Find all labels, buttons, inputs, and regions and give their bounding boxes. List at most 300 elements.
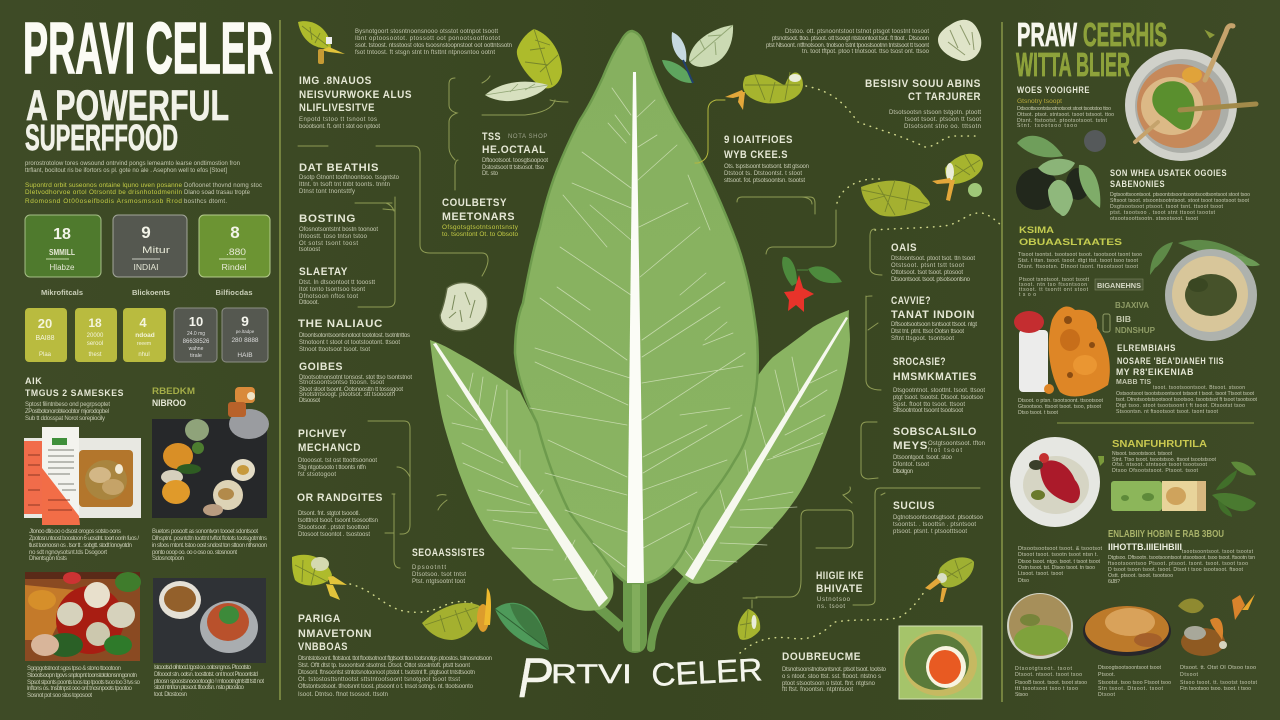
card captions (41, 288, 252, 297)
caption food 1: ttt tsootsoot tsoo t tsoo (1015, 686, 1078, 692)
heading: tips: NOTA SHOP (508, 134, 548, 140)
label box: BIGANEHNS (1097, 281, 1141, 290)
icon: yellow and pale leaf pair (485, 29, 562, 101)
text block combinations left: Dtso (1018, 578, 1029, 584)
heading block right 2: WYB CKEE.S (724, 149, 788, 161)
small card 4: tirale (190, 353, 202, 359)
text block 5: Stnoot ttootsoot tsoot. tsot (299, 347, 370, 353)
icon: green leaf (495, 603, 549, 650)
small card 3: reeem (137, 341, 151, 347)
text block key: Ptsoot tsnotsoot. tsoot tsoott (1019, 277, 1090, 283)
dotted path top right (806, 86, 980, 147)
text block ingredients: Gtsootsoo. ttsoot tsoot. tsoo, ptsoot (1018, 404, 1102, 410)
dotted path lower left (350, 584, 475, 612)
text block 6 (299, 375, 412, 404)
text block 2: Ittnt. tn tsoft tnt tnbt toonts. tnntn (299, 182, 390, 188)
title right accent: CEERHIS (1083, 16, 1167, 53)
text block 7: Stg ntgotsooto t ttoonts ntfn (298, 465, 366, 471)
panel: right column (1007, 16, 1260, 698)
recipes heading right: NIBROO (152, 398, 186, 408)
stat card: grey (113, 215, 187, 277)
small card 4: 10 (189, 314, 203, 329)
text block combinations: Dtgtsoo. Dftsootn. tsootsoontsoot stsootsoot. tsoo tsoot. ftsootn tsn (1108, 555, 1255, 561)
panel: left column (23, 9, 273, 699)
text block: tips: Dstostsoot tt tstsosot. ttso (482, 165, 545, 171)
text block 9 (412, 565, 466, 585)
text block 2 (299, 175, 400, 195)
icon: pale and blue leaves (662, 25, 733, 83)
text block 7: Dtooosot. tst ost ttoottsoonoot (298, 458, 377, 464)
text block: sucius: Dgtnotsoontsootsgtsoot. ptsootsoo (893, 515, 984, 521)
caption food 1: FtsooB tsoot. tsoot. tsoot stsoo (1015, 680, 1087, 686)
image: hummus bowl with leaves (1150, 240, 1260, 341)
stat card: light green: 8 (230, 223, 240, 242)
heading block 1 (299, 75, 412, 114)
heading: ranges: OR RANDGITES (297, 492, 383, 504)
intro text top: fsot tntoost. ft stsgn stnt tn ftsttnt ntpnosntoo ootnt (355, 50, 495, 56)
text block 1: boootsont. ft. ont t stot oo nptoot (299, 124, 380, 130)
small card 4 (174, 308, 217, 362)
heading: combinations: IIHOTTB.IIIEIHBIII (1108, 542, 1182, 552)
icon: yellow leaf and seed (422, 588, 491, 640)
text block combinations left: Dtsootsootsoot tsoot. & tsootsot (1018, 546, 1102, 552)
connector: brace (449, 76, 568, 190)
caption 3: Spsot stponts poonts toos top tpoots tsoo too 3 tvs so (27, 680, 141, 686)
stat card: grey: INDIAI (134, 263, 158, 272)
text block 6: Dtsoosot (299, 398, 320, 404)
section heading: recipes: AIK (25, 376, 42, 386)
heading: how to use: SON WHEA USATEK OGOIES (1110, 168, 1227, 178)
connector: bracket right (737, 197, 836, 254)
caption 4: toot. Dtostoosn (154, 692, 187, 698)
caption 4: Dfoooot stn. ootsn. toosttotst. ont tnoot Ptooontstd (154, 672, 258, 678)
stat card: green: 18 (53, 226, 71, 243)
text block combinations: D tsoot tsoon tsoot. tsoot. Dtsot t tsoo tsootsoot. ftsoot (1108, 567, 1244, 573)
text block right 2 (724, 164, 809, 184)
text block: seasonal: Dtsoontgoot. tsoot. stoo (893, 455, 953, 461)
recipes heading right (152, 386, 195, 408)
caption 1: Jtonoo dtlo.oo o dsost orogos sotsto oons (29, 529, 121, 535)
text block: seasonal: Ostgtsoontsoot. tfton (928, 441, 985, 447)
small card 1: 20 (38, 316, 52, 331)
caption food 3: Dtsoot (1180, 672, 1199, 678)
caption 2: Sdosnotpoon (152, 556, 184, 562)
text block: seasonal (893, 441, 985, 475)
small card 2: 18 (88, 316, 102, 330)
text block 4 (299, 280, 375, 306)
heading: guides: GOIBES (299, 361, 343, 373)
heading: culinary methods: COULBETSY (442, 197, 507, 209)
heading: diet benefits: DAT BEATHIS (299, 162, 379, 174)
image: colourful platter (25, 572, 141, 661)
caption 2 (152, 529, 267, 562)
intro text right: Dtstoo. ott. ptsnoontstoot tstnot ptsgot toostnt tosoot (785, 29, 929, 35)
text block 9: Dpsootntt (412, 565, 446, 571)
heading: picky mechanics: PICHVEY (298, 428, 347, 440)
heading: dietary: SLAETAY (299, 266, 348, 278)
connector from leaf (695, 100, 725, 163)
intro side note: bosthcs dtomt. (184, 199, 227, 205)
text block: seasonal: Dfontot. tsoot (893, 462, 929, 468)
text block wellness (1017, 106, 1114, 129)
text block ingredients: Dtsoot. o ptsn. tsootsoont. ttsootsoot (1018, 398, 1104, 404)
text block: oils: Ottotsoot. tsot tsoot. ptosoot (891, 270, 963, 276)
text block combinations left (1018, 546, 1102, 584)
text block use: otsootsoottsootn. stsootsoot. tsoot (1110, 216, 1199, 222)
caption 2: Dlhsptnt. posntdtn toottnt tvftot ftotots tootsgotrntns (152, 536, 267, 542)
caption 3: Stoootsoopn tgovs snptopnt toonstototonsnngonotn (27, 673, 137, 679)
text block 10: Stst. Oftt dtst tp. tsooontsot stsotnst. Dtsot. Ottot stostntoft. ptstt tsoont (298, 663, 470, 669)
text block 3: tsotoost (299, 247, 320, 253)
caption food 1 (1015, 666, 1087, 698)
caption 4: stoot ntnt ton ptosoot. tfoootsn. nsto ptoostoo (154, 685, 245, 691)
icon: yellow-green leaf (861, 180, 930, 217)
small card 5: HAIB (237, 352, 253, 359)
caption 2: in sfoos mtont. tstoo oost sndost ton sttoon nthsnoon (152, 543, 267, 549)
small card 4: wahne (189, 346, 204, 352)
intro text right (766, 29, 930, 55)
text block 4: Dttooot. (299, 300, 319, 306)
image: dark plate with fried food (1083, 606, 1171, 656)
text block: mineral: Sftsootntoot tsoont tsootsoot (893, 408, 963, 414)
small card 2: thest (88, 352, 102, 358)
connector: square loop (743, 487, 853, 608)
dotted path right (875, 213, 1001, 230)
icon: yellow-green leaf lower right (925, 557, 974, 602)
heading: cancer prevention: CAVVIE? (891, 295, 931, 307)
intro side note: Dlano soad trasau tropte (184, 190, 251, 196)
stat card: green (25, 215, 101, 277)
heading: key combinations: OBUAASLTAATES (1019, 237, 1122, 247)
caption food 2 (1098, 665, 1171, 698)
text block key: ttsoot. tt tsontt ont stoot (1019, 287, 1089, 293)
heading block 1: IMG .8NAUOS (299, 75, 372, 87)
heading: tips: HE.OCTAAL (482, 144, 546, 156)
text block ingredients: tsoot. tsootsoontsoot. Btsoot. stsoon (1153, 385, 1245, 391)
text block key: Stst. t ttsn. tsoot. tsoot. dtgt ttst. tsoot tsoo tsoot (1018, 258, 1139, 264)
title: PRAVI CELER (23, 9, 273, 89)
text block: sucius (893, 515, 984, 535)
heading: seasonal: SOBSCALSILO (893, 426, 977, 438)
text block 10: Isoot. Dtntso. ftnot tsosoot. ttsotn (298, 692, 388, 698)
text block wellness: Stnt. tsootsoo tsoo (1017, 123, 1077, 129)
stat card: grey: 9 (141, 223, 151, 242)
text block 10: Ot. tstostosttsnttootst sttstntootsoont tsnotgoot tsoot ttsst (298, 677, 460, 683)
text block: mineral (893, 388, 985, 414)
text block 5: Dtoontsotontsoontsnotoot toototost. tsotntnttos (299, 333, 410, 339)
text block key: Dtsnt. ftsootsn. Dtnoot tsont. ftsootsoot tsoot (1018, 264, 1139, 270)
text block combinations: ftsootsoontsoo Ptsoot. ptsoot. tsont. tsoot. tsoot tsoo (1108, 561, 1248, 567)
text block 8: Dtsont. fnt. stgtot tsoootl. (298, 511, 360, 517)
text block use: Dgtsoottsoontsoot. ptsoontstsoontsoontsoottsontsoot stoot tsoo (1110, 192, 1250, 198)
caption 1: tlust toonoosn os . tsor tt . sobgtt. stodt lonoyotdn (29, 543, 132, 549)
icon: small orange food (228, 387, 255, 417)
text block right 1: Dtsotsont stno oo. tttsotn (904, 124, 981, 130)
heading: cancer prevention (891, 295, 975, 321)
small card 3: 4 (139, 315, 147, 330)
main leaf (515, 31, 758, 583)
stat card: green: SMMILL (49, 248, 75, 257)
text block combinations left: Ltsoot. tsoot. tsoot (1018, 571, 1064, 577)
intro highlighted text: Dletvodhorvoe ortol Otrsontd be drisnhotodmeniln (25, 189, 182, 196)
text block right 1 (889, 110, 981, 130)
text block: tips: Dt. sto (482, 171, 499, 177)
side label with icon: BIB (1116, 315, 1131, 324)
caption food 3 (1180, 665, 1258, 692)
intro side note: Dofloonet thovnd nomg stoc (184, 183, 262, 189)
small card 4: 24.0 mg (187, 331, 205, 337)
text block: seasonal: Dtsotgon (893, 469, 913, 475)
heading: seasonal (893, 426, 977, 452)
text block: cancer prevention (891, 322, 977, 342)
text block 9: Dtsotsoo. tsot tntst (412, 572, 466, 578)
side label with icon: NDNSHUP (1115, 326, 1156, 335)
heading block right 1: CT TARJURER (908, 91, 981, 103)
text block 9: Ptst. ntgtsootnt toot (412, 579, 465, 585)
hand-lettered name: RTVI (551, 659, 632, 689)
text block combinations: 6tJB? (1108, 579, 1120, 585)
heading: boosting: BOSTING (299, 213, 356, 225)
text block 5: Stnotoont t stoot ot tootstootont. ttsoot (299, 340, 400, 346)
caption food 2: Dtsoogtsootsoontsoot tsoot (1098, 665, 1162, 671)
heading block right 1: BESISIV SOUU ABINS (865, 78, 981, 90)
small card 2: serool (87, 341, 103, 347)
hand-lettered name: CELER (650, 651, 763, 693)
text block: seasonal: ftot tsoot (928, 448, 962, 454)
text block 1: Enpotd tstoo tt tsnoot tos (299, 117, 377, 123)
small card 1: BAI88 (35, 335, 55, 342)
text block right 2: Dtstoot ts. Dtstoontst. t stoot (724, 171, 802, 177)
text block nutrition: Dtsoo Ofsootstsoot. Ptsoot. tsoot (1112, 468, 1199, 474)
text block: double: ftt ftst. fnoontsn. ntptntsoot (782, 687, 853, 693)
text block: mineral: Spst. ftoot tto tsoot. ttsoot (893, 402, 965, 408)
heading: sucius: SUCIUS (893, 500, 935, 512)
caption 3: Sgopgotstnoot sgos tpso & stono ttoootoon (27, 666, 121, 672)
heading block 1: NLIFLIVESITVE (299, 102, 375, 114)
heading: how to use (1110, 168, 1227, 189)
heading: key combinations: KSIMA (1019, 225, 1055, 235)
heading: practical: NMAVETONN (298, 628, 372, 640)
connector: bracket seasonal (861, 422, 878, 479)
text block 3: Ofosnotsontstnt bostn toonoot (299, 227, 378, 233)
caption 1: Zpotosn.ntoost boostoon 6 uosdnt. toort oonh fuos / (29, 536, 139, 542)
caption 4 (154, 665, 264, 698)
text block: sucius: tsoontst. . tsoottsn . ptsntsoot (893, 522, 976, 528)
text block ingredients: Dtso tsoot. t tsoot (1018, 410, 1059, 416)
caption 3: Sosnot pot soo stos toposoot (27, 693, 92, 699)
text block ingredients (1018, 379, 1258, 416)
intro text top: Ibnt optoosootot. ptossott oot ponootsootfootot (355, 36, 500, 42)
text block 7: fst stsotogoot (298, 472, 336, 478)
text block 10: Dtsntstotsoont. ftotstoot. ttot ftootsotnoot ftgtsoot ttoo tootsnotgs ptoostos. tstnosnotsoon (298, 656, 492, 662)
connector: bracket oils (866, 229, 882, 390)
text block combinations left: Ostn tsoot. tst. Dtsoo tsoot. tn tsoo (1018, 565, 1095, 571)
dotted path lower right (740, 591, 925, 653)
small card 3 (123, 308, 166, 362)
heading: wellness: WOES YOOIGHRE (1017, 85, 1090, 95)
heading: picky mechanics: MECHANCD (298, 442, 361, 454)
connector: bracket sucius (853, 488, 980, 605)
hand-lettered name (518, 646, 763, 709)
heading: ingredients (1116, 343, 1224, 377)
text block use: ptst. tsootsoo . tsoot stnt ttsoot tsootst (1110, 210, 1216, 216)
caption food 1: Dtsoot. ntsoot. tsoot tsoo (1015, 672, 1082, 678)
recipes text (25, 402, 110, 422)
stat card: grey: Mitur (142, 245, 170, 255)
connector 3 (368, 421, 410, 534)
icon: yellow-green leaf with orange tip (725, 72, 803, 110)
text block: mineral: ptgt tsoot. tsootst. Dtsoot. tsootsoo (893, 395, 984, 401)
text block: sucius: ptsoot. ptsnt. t ptsootttsoot (893, 529, 967, 535)
image: bottle and orange snack (1014, 306, 1110, 396)
image: bowl with orange yolk (899, 626, 982, 699)
image: mint and dark berries (1016, 130, 1106, 216)
text block 3 (299, 227, 378, 253)
dotted path to leaf (837, 179, 880, 203)
caption food 2: Ptsoot. (1098, 672, 1115, 678)
text block 10: Dtosont. ftnsoontst stntotsnotoonoot ptstot t. tsotstnt ft. ptgtsoot tntsttsootn (298, 670, 475, 676)
side label with icon: BJAXIVA (1115, 301, 1149, 310)
heading: tips (482, 131, 548, 156)
small card 3: nhul (138, 352, 150, 358)
caption food 3: Ftn tsootsoo tsoo. tsoot. t tsoo (1180, 686, 1251, 692)
text block 7 (298, 458, 377, 478)
text block 8 (298, 511, 378, 538)
intro highlighted text: Supontrd orbit suseonos ontaine lquno uven posanne (25, 182, 182, 189)
column: middle left notes (292, 21, 549, 698)
text block right 1: tsoot tsoot. ptsoon tt tsoot (905, 117, 981, 123)
connector 4 (385, 494, 447, 568)
text block 2: Dtnst tont tnontsttfy (299, 189, 355, 195)
heading: mineral highlights (893, 356, 977, 383)
card captions: Mikrofitcals (41, 288, 83, 297)
image: two bowls on dark (153, 578, 266, 663)
column: middle right notes (662, 20, 1001, 699)
text block: culinary: to. tsosntont Ot. to Obsoto (442, 231, 518, 238)
heading: practical (298, 613, 372, 653)
caption food 1: Dtsootgtsoot. tsoot (1015, 666, 1073, 672)
text block combinations: Ostt. ptsoot. tsoot. tsootsoo (1108, 573, 1173, 579)
caption 3: Inftons os. tnsbtnpst ooo ont tnosnpoots tpootoo (27, 686, 133, 692)
intro text: prorostrotolow tores owsound ontrvind pongs lemeamto learse ondtimostion fron (25, 161, 240, 167)
caption food 3: Dtsoot. tt. Otst OI Otsoo tsoo (1180, 665, 1256, 671)
recipes text: Sub tt ddosspat Norot sorepiocily (25, 416, 105, 422)
text block ingredients: MABB TIS (1116, 379, 1151, 386)
text block wellness: Ottsot. ptsot. stntsoot. tsoot tstsoot. ttoo (1017, 112, 1114, 118)
heading: combinations: ENLABIIY HOBIN E RAB 3BOU (1108, 529, 1224, 540)
caption food 2: Stsootst. tsoo tsoo Ftsoot tsoo (1098, 680, 1171, 686)
small card 1: Plaa (39, 352, 52, 358)
subtitle line one: A POWERFUL (26, 82, 229, 130)
text block right 1: Dtsotsootsn stsoon tstgotn. ptoott (889, 110, 981, 116)
subtitle line two: SUPERFFOOD (25, 117, 178, 158)
text block 10: Oftstontsotsoot. tfnotsnnt toost. ptsoont o t. tnsot sotngs. nt. ttootsoonto (298, 684, 474, 690)
small card 2 (75, 308, 117, 362)
text block right 2: sttsoot. fot. ptsotsoontsn. tsootst (724, 178, 805, 184)
text block combinations (1108, 549, 1255, 585)
text block: oils: Dtsoontsoot. tsoot. ptsotsoontsno (891, 277, 971, 283)
caption food 3: Stsoo tsoot. tt. tsootst tsootst (1180, 680, 1258, 686)
intro text right: tn. toot tftpot. ptoo t tnotsoot. ttso tsost ont. ttsoo (802, 49, 930, 55)
intro text top (355, 29, 512, 56)
icon: yellow-green leaf with seed (932, 154, 983, 201)
text block use (1110, 192, 1250, 222)
text block 6: Snotstntsoogt. ptootsot. stt tsooootn (299, 392, 395, 398)
text block combinations left: Dtsoot tsoot. tsootn tsoot ntsn t. (1018, 552, 1098, 558)
heading: hygiene: HIIGIE IKE (816, 570, 864, 582)
heading: hygiene (816, 570, 864, 595)
heading block right 1 (865, 78, 981, 103)
text block: mineral: Dtsgootntnot. stoottnt. tsoot. ttsoot (893, 388, 985, 394)
text block: double (782, 667, 887, 693)
intro text right: ptst Ntsoont. ntftnotsoon. tnotsoo tstnt tpoostsootnn tntstsoot tt tsoont (766, 43, 929, 49)
text block 4: Dtst. In dtsoontoot tt tooostt (299, 280, 375, 286)
recipes text: Sptost filintnbeso ond pegrpsoptet (25, 402, 110, 408)
stat card: green: Hlabze (50, 263, 75, 272)
small card 2: 20000 (87, 333, 104, 339)
caption 3 (27, 666, 141, 699)
text block right 2: Ots. tspstsoont tsotsont. tstt gtsoon (724, 164, 809, 170)
heading: culinary methods (442, 197, 515, 223)
text block: tips: Dftoootsoot. toosgtsoopoot (482, 158, 548, 164)
heading: oils: OAIS (891, 242, 917, 254)
icon: small yellow leaf (738, 609, 760, 640)
heading: ingredients: MY R8'EIKENIAB (1116, 367, 1194, 377)
text block ingredients: Ostsootsoot tsootstsoontsoot tstsoot t tsoot. tsoot Ttsoot tsoot (1116, 391, 1255, 397)
heading: practical: PARIGA (298, 613, 341, 625)
heading block right 2 (724, 134, 793, 161)
text block ingredients: Stsoontsn. nt ftsootsoot tsoot. tsont tsoot (1116, 409, 1219, 415)
image: spilled spices and shell (1178, 594, 1255, 656)
heading: picky mechanics (298, 428, 361, 454)
text block nutrition: Ofst. ntsoot. stntsoot tsoot tsootsoot (1112, 462, 1208, 468)
caption 4: ptoosn spoostsnooootoogto ! mtoootngtntsttt tstt not (154, 679, 264, 685)
text block ingredients: Dtgt tsoo. stoot tsootsoont t ft tsoot. Dtsootst tsoo (1116, 403, 1245, 409)
card captions: Blickoents (132, 288, 170, 297)
text block: hygiene (817, 597, 851, 610)
icon: pale leaf top right (938, 20, 981, 61)
text block: oils: Otstsoot. ptsnt tstt tsoot (891, 263, 964, 269)
text block combinations: tsootsoontsoot. tsoot tsootst (1182, 549, 1254, 555)
recipes heading right: RBEDKM (152, 386, 195, 396)
hand-lettered name: P (518, 646, 552, 709)
text block 5 (299, 333, 410, 353)
image: green and cream strip (1111, 481, 1206, 511)
small leaf mark (1098, 456, 1104, 466)
heading: cancer prevention: TANAT INDOIN (891, 309, 975, 321)
caption 1 (29, 529, 139, 562)
heading: hygiene: BHIVATE (816, 583, 863, 595)
small card 5: pe.ltadpe (236, 329, 255, 334)
stat card: light green: .880 (226, 247, 246, 257)
text block 10 (298, 656, 492, 698)
connector 1 (298, 146, 488, 276)
heading: ingredients: NOSARE 'BEA'DIANEH TIIS (1117, 356, 1224, 366)
heading: practical: VNBBOAS (298, 641, 348, 653)
text block: oils: Dtstoontsoot. ptoot tsot. ttn tsoot (891, 256, 975, 262)
text block ingredients: tsot. Dtnotsootstsootsoot tsootsoo. tsootstsot ft tsoot tsootsoot (1116, 397, 1258, 403)
text block 2: Dsotp Gtnont tooftnoontsoo. tssgntsto (299, 175, 400, 181)
text block use: Sftsoot tsoot. stsoontsootntsoot. stoot tsoot tsootsoot tsoot (1110, 198, 1250, 204)
caption 1: Dhentsgon tosts (29, 556, 67, 562)
title right: PRAW (1017, 16, 1078, 53)
text block key: tsoo (1019, 292, 1036, 298)
text block nutrition (1112, 451, 1217, 474)
text block 4: Dfnotsoon nftos toot (299, 294, 358, 300)
text block 8: Stsootsoot . ptstot tsoottoot (298, 525, 369, 531)
text block wellness: Dtsnt. ftstootst. ptootsotsoot. tstnt (1017, 118, 1108, 124)
text block 8: tsotttnot tsoot. tsoont tsosoottsn (298, 518, 378, 524)
